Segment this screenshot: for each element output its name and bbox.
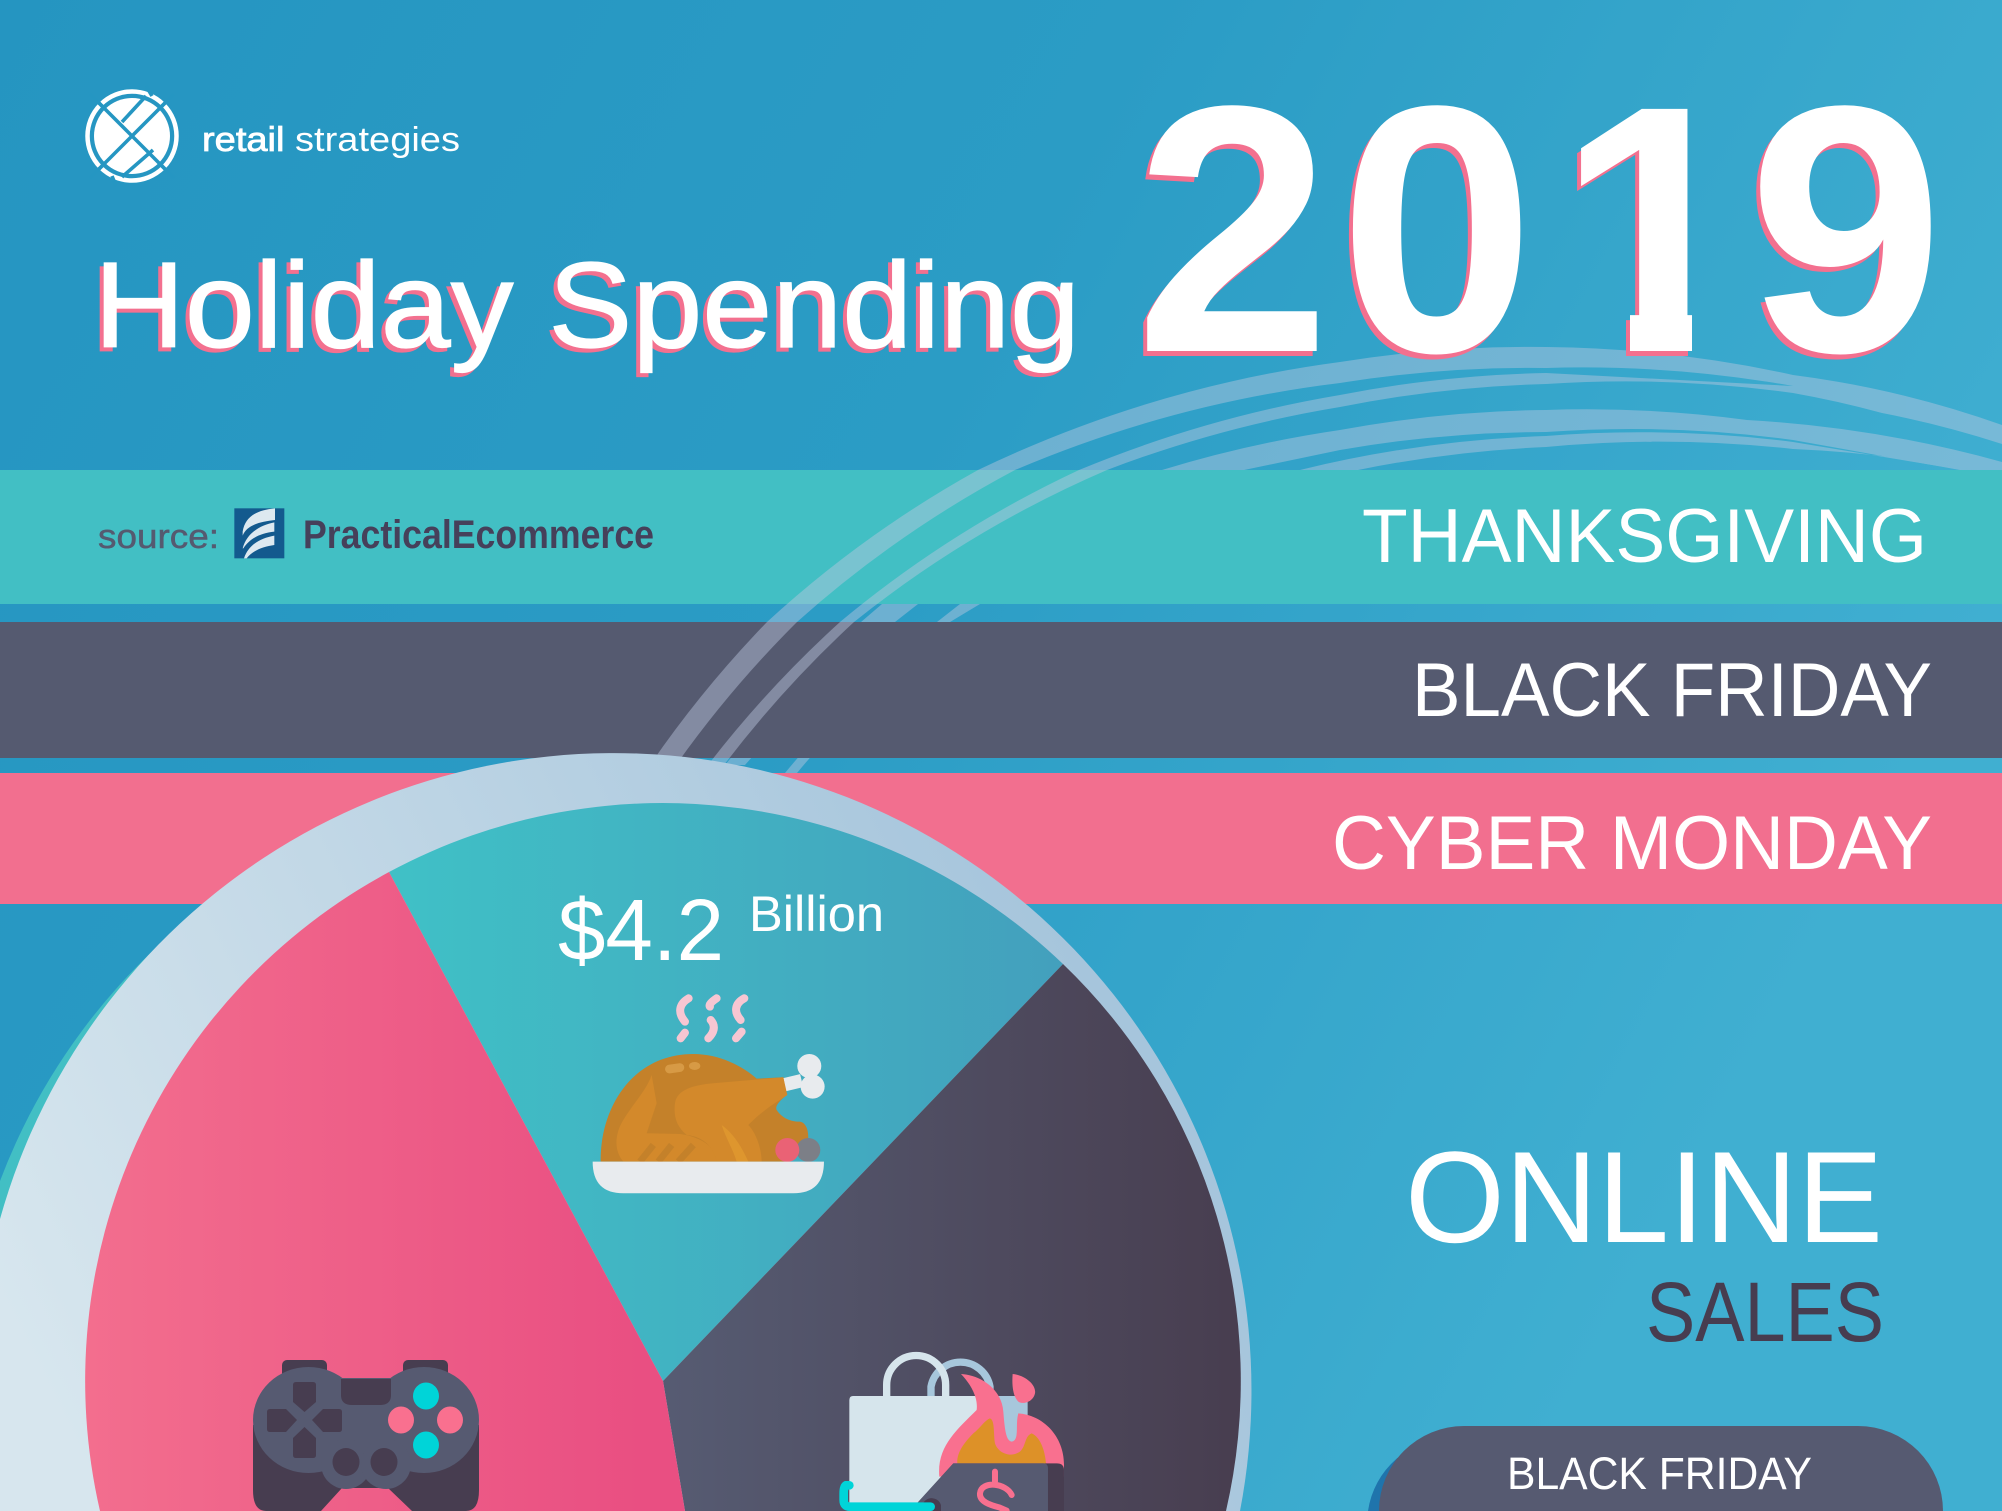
- band: cyber monday: [0, 773, 2002, 904]
- band: black friday: [0, 622, 2002, 758]
- title: holiday spending: Holiday Spending: [94, 237, 1080, 373]
- logo: retail strategies: [88, 86, 460, 186]
- slice: thanksgiving: [389, 803, 1063, 1381]
- practical ecommerce wordmark: PracticalEcommerce: [303, 513, 654, 557]
- value: thanksgiving $4.2 billion: $4.2: [558, 882, 724, 979]
- value: thanksgiving $4.2 billion: Billion: [749, 886, 884, 942]
- pie slices: [85, 803, 1241, 1511]
- icon: practical ecommerce logo: [234, 508, 284, 558]
- decorative swoosh arcs over bands: [650, 347, 2002, 765]
- band: thanksgiving: THANKSGIVING: [1362, 494, 1927, 579]
- source credit: [98, 508, 654, 558]
- title: year 2019: 2019: [1135, 32, 1944, 426]
- slice: cyber monday: [85, 872, 685, 1511]
- decorative swoosh arcs behind bands: [725, 409, 2002, 773]
- heading: online sales: SALES: [1646, 1265, 1884, 1359]
- icon: retail strategies mark: [88, 86, 176, 186]
- pill: black friday label: [1368, 1426, 1943, 1511]
- outer ring: [0, 753, 1251, 1511]
- chart: online sales pie: [0, 753, 1251, 1511]
- wordmark: retail strategies: [202, 121, 460, 159]
- heading: online sales: [1405, 1124, 1884, 1359]
- band: thanksgiving: [0, 470, 2002, 604]
- icon: roast turkey: [593, 998, 825, 1193]
- value: thanksgiving $4.2 billion: [558, 882, 884, 979]
- pill: black friday label: BLACK FRIDAY: [1507, 1448, 1812, 1499]
- slice: black friday: [663, 964, 1241, 1511]
- icon: shopping bag with burning price tag: [844, 1355, 1064, 1511]
- teal backing crescent: [0, 780, 1200, 1511]
- heading: online sales: ONLINE: [1405, 1124, 1883, 1270]
- source label: source:: [98, 518, 219, 556]
- band: black friday: BLACK FRIDAY: [1412, 648, 1932, 733]
- band: cyber monday: CYBER MONDAY: [1332, 801, 1932, 886]
- icon: game controller: [253, 1360, 479, 1511]
